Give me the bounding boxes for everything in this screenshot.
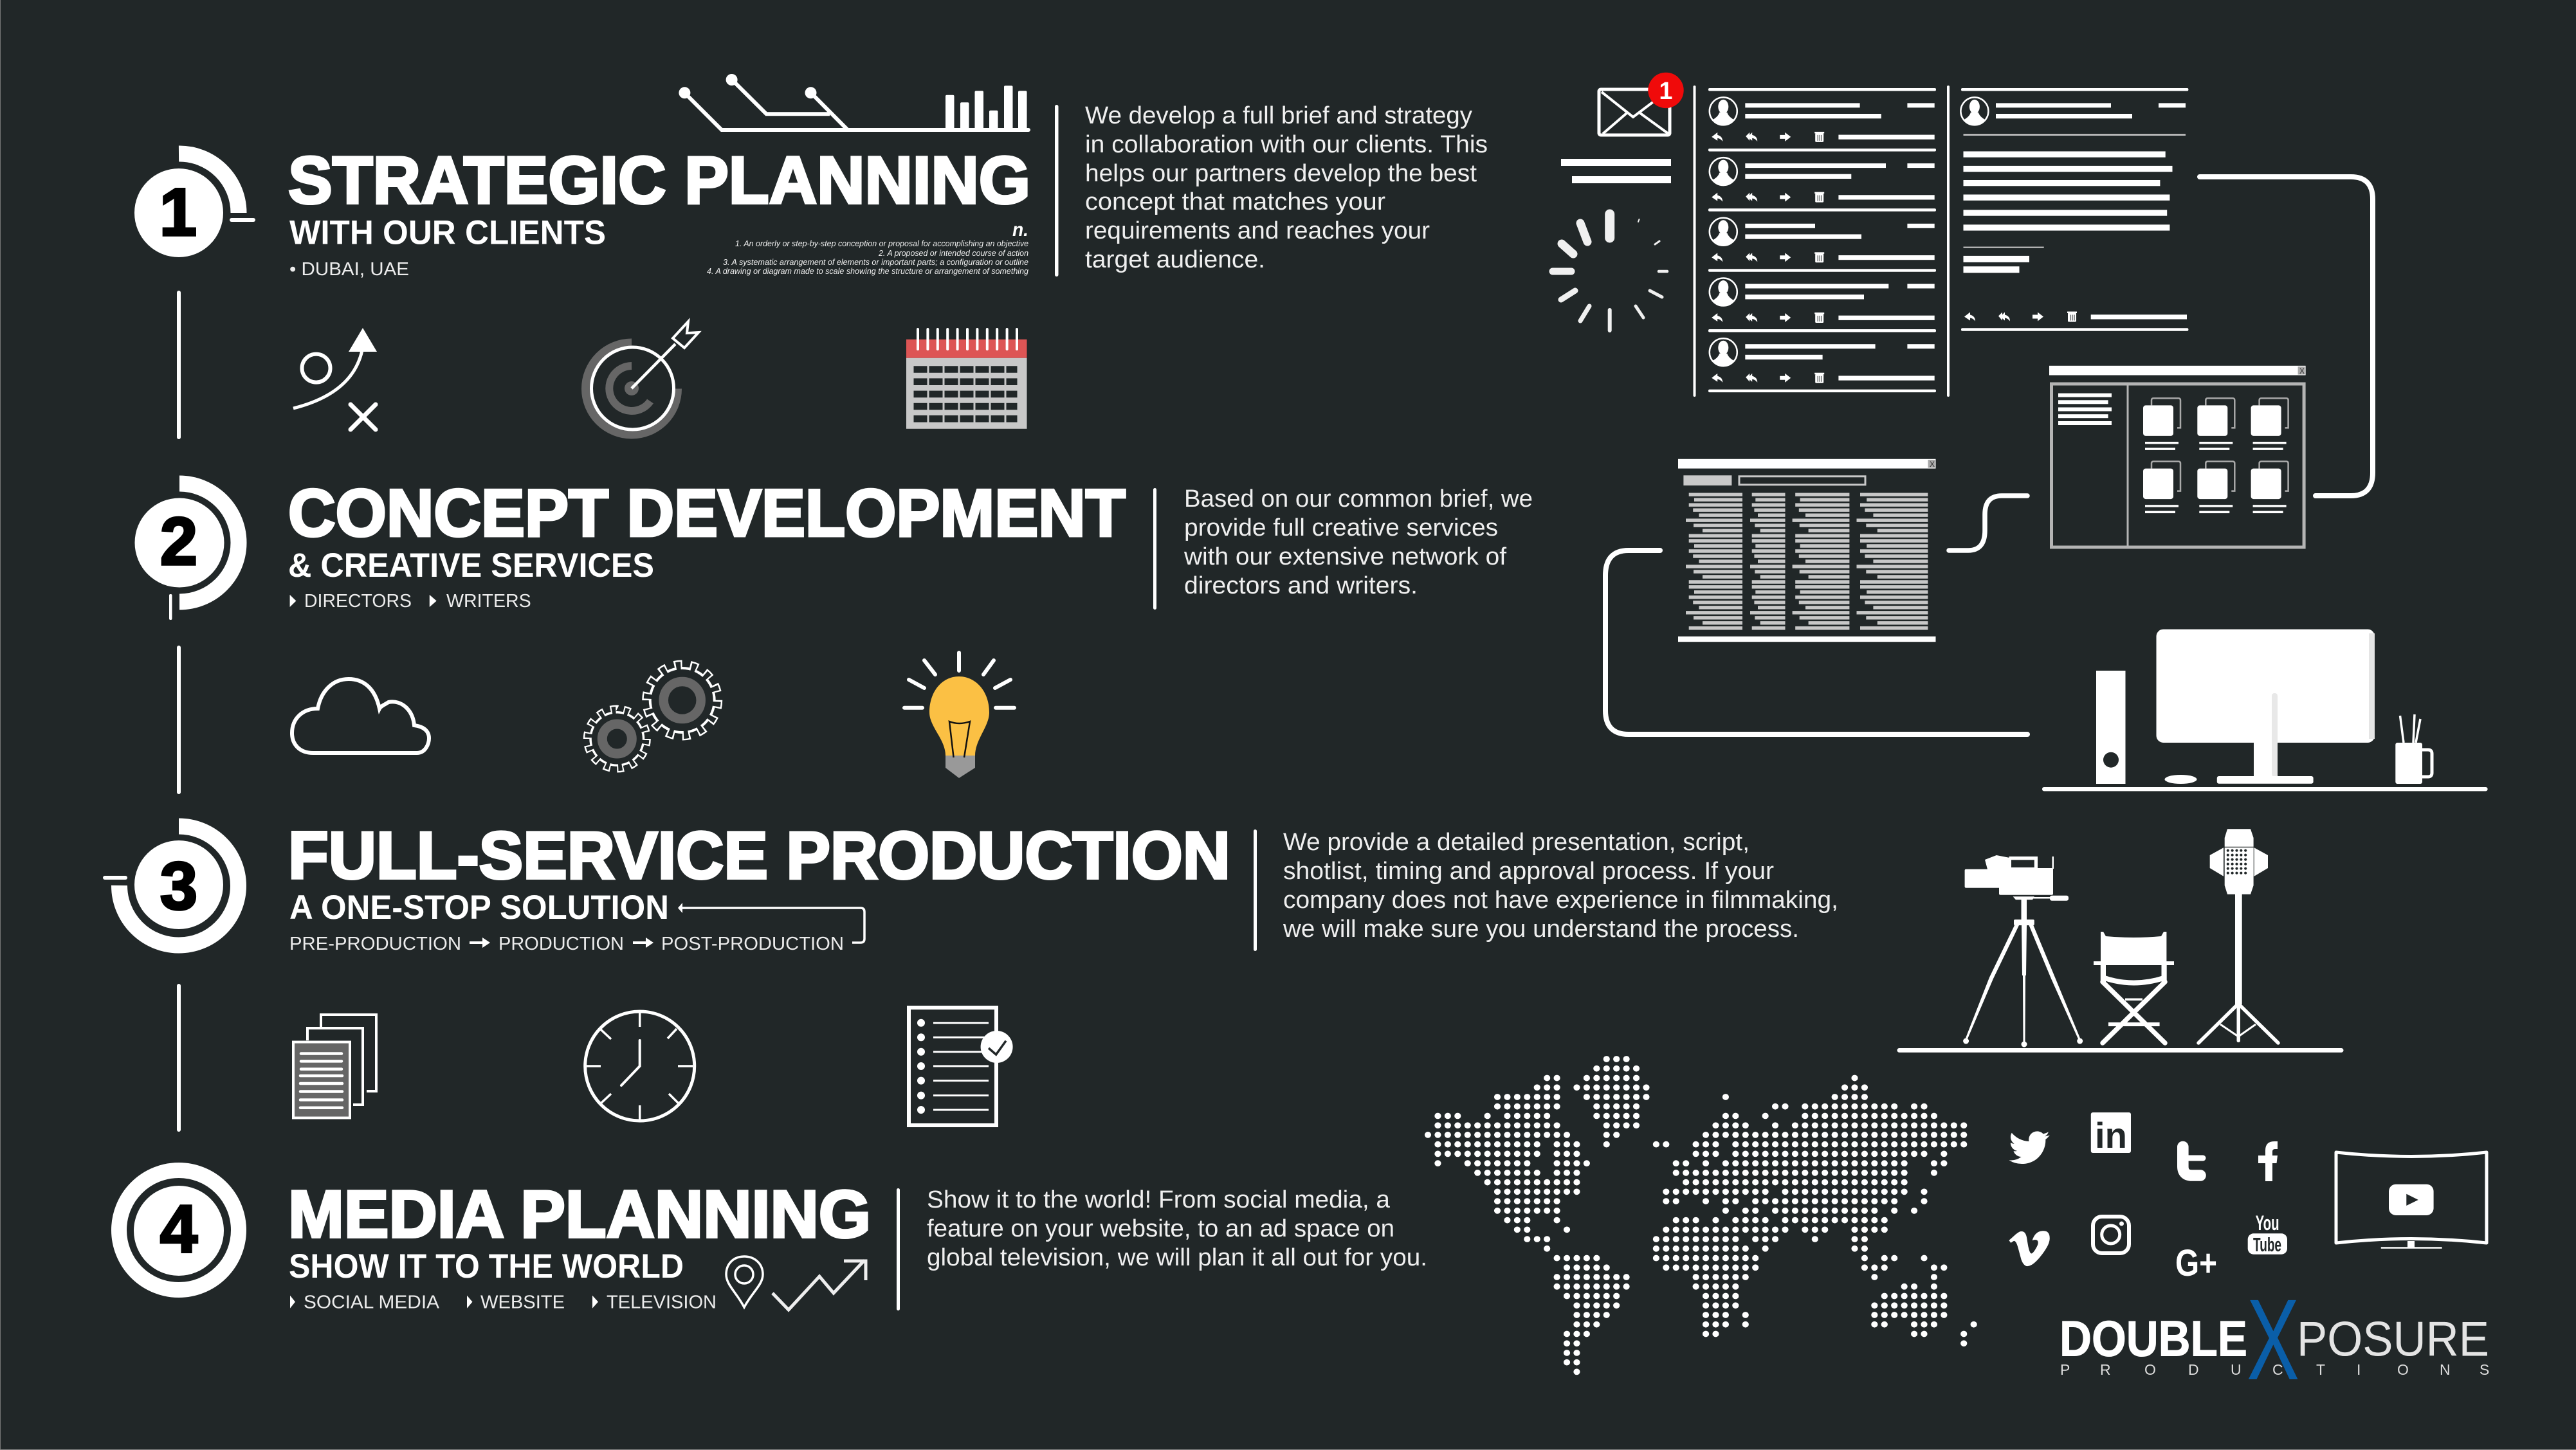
icon: play diagram [293, 328, 377, 430]
dictionary definition [707, 219, 1028, 276]
badge 3: 3 [160, 849, 197, 924]
logo: double xposure productions: DOUBLE [2060, 1310, 2247, 1367]
icon: vimeo [2009, 1231, 2050, 1266]
arrowhead [678, 903, 682, 913]
list: media channels: SOCIAL MEDIA [304, 1292, 440, 1313]
icon: youtube wordmark [2248, 1211, 2287, 1256]
section 4: media planning [119, 1170, 1427, 1313]
list: media channels: TELEVISION [607, 1292, 717, 1313]
badge 1 [134, 154, 255, 257]
icon: youtube wordmark: Tube [2253, 1233, 2281, 1256]
illustration: file browser window [2049, 366, 2306, 547]
heading: concept development: CONCEPT DEVELOPMENT [288, 476, 1126, 550]
icon: location pin [726, 1256, 763, 1307]
heading: full-service production: FULL-SERVICE PRODUCTION [288, 819, 1230, 893]
inbox lines [1561, 162, 1671, 180]
section 2: concept development [135, 476, 1533, 778]
logo: double xposure productions: X [2247, 1275, 2299, 1404]
list: media channels: WEBSITE [480, 1292, 565, 1313]
message row 3 [1710, 218, 1935, 262]
badge 4: 4 [160, 1192, 197, 1267]
illustration: film set [1897, 829, 2344, 1053]
icon: google plus: G+ [2175, 1242, 2217, 1284]
icon: checklist [909, 1008, 1013, 1125]
icon: light stand [2198, 829, 2278, 1043]
description 2: with our extensive network of [1183, 543, 1506, 570]
connector 1 to 2 [177, 291, 181, 439]
description 1: requirements and reaches your [1085, 217, 1430, 244]
logo: double xposure productions: PRODUCTIONS [2060, 1361, 2489, 1378]
logo: double xposure productions: POSURE [2297, 1312, 2489, 1367]
logo: double xposure productions [2060, 1275, 2489, 1404]
icon: gears [587, 665, 718, 768]
description 4: Show it to the world! From social media, a [927, 1186, 1391, 1213]
icon: target with arrow [586, 322, 699, 435]
description 2: Based on our common brief, we [1184, 485, 1533, 512]
icon: calendar [906, 329, 1027, 429]
icon: growth arrow [772, 1260, 866, 1310]
description 3: company does not have experience in filmmaking, [1283, 887, 1838, 914]
icon: light bulb [904, 653, 1014, 778]
illustration: desktop computer [2042, 630, 2488, 791]
illustration: dotted world map [1428, 1059, 1974, 1372]
icon: clock [585, 1011, 695, 1121]
connector: table to desk [1605, 550, 2027, 734]
description 1: in collaboration with our clients. This [1085, 131, 1488, 158]
subheading: creative services: & CREATIVE SERVICES [288, 547, 654, 585]
icon: loading spinner [1553, 214, 1667, 331]
description 1: concept that matches your [1085, 188, 1385, 215]
list: directors, writers [290, 591, 531, 612]
list: media channels [290, 1292, 717, 1313]
description 4 [927, 1186, 1427, 1271]
icon: strategy chart [679, 74, 1028, 131]
illustration: file browser window: X [2299, 367, 2305, 376]
dictionary definition: 1. An orderly or step-by-step conception or proposal for accomplishing an objective [735, 239, 1028, 248]
description 4: feature on your website, to an ad space on [927, 1215, 1394, 1242]
icon: twitter [2009, 1131, 2050, 1164]
dictionary definition: 4. A drawing or diagram made to scale showing the structure or arrangement of something [707, 267, 1028, 276]
icon: television with play button [2336, 1152, 2487, 1249]
subheading: show it to the world: SHOW IT TO THE WORLD [289, 1247, 684, 1285]
description 1: target audience. [1085, 246, 1265, 273]
connector 3 to 4 [177, 984, 181, 1132]
subheading: with our clients: WITH OUR CLIENTS [289, 213, 606, 252]
icon: director chair [2094, 932, 2174, 1043]
message detail [1960, 88, 2188, 331]
icon: youtube wordmark: You [2256, 1211, 2279, 1235]
description 1 [1085, 102, 1488, 273]
location: dubai: • DUBAI, UAE [289, 259, 409, 280]
subheading: one-stop solution: A ONE-STOP SOLUTION [289, 889, 669, 927]
icon: cloud [292, 679, 429, 753]
icon: tumblr [2183, 1147, 2203, 1175]
description 3 [1283, 829, 1838, 943]
icon: facebook [2258, 1141, 2278, 1181]
connector: email to files [2200, 177, 2373, 496]
message row 1 [1710, 97, 1935, 142]
illustration: spreadsheet window [1678, 459, 1936, 642]
icon: instagram [2093, 1217, 2129, 1253]
badge 4 [119, 1170, 239, 1290]
message row 2 [1710, 158, 1935, 203]
dictionary definition: 3. A systematic arrangement of elements or important parts; a configuration or outline [723, 258, 1028, 267]
description 1: helps our partners develop the best [1085, 160, 1477, 187]
inbox list [1708, 88, 1936, 392]
production pipeline: PRE-PRODUCTION [289, 934, 461, 954]
badge 2 [135, 484, 239, 620]
badge 2: 2 [160, 504, 197, 579]
icon: envelope with badge: 1 [1659, 78, 1673, 105]
description 2: directors and writers. [1184, 572, 1418, 599]
description 3: We provide a detailed presentation, script, [1283, 829, 1749, 856]
big gear [647, 665, 718, 736]
return arrow [682, 908, 864, 943]
connector: files to table [1949, 496, 2027, 550]
heading: media planning: MEDIA PLANNING [288, 1177, 871, 1252]
illustration: email client [1553, 73, 2188, 397]
description 2 [1183, 485, 1533, 599]
badge 1: 1 [160, 175, 197, 250]
connector 2 to 3 [177, 646, 181, 794]
list: directors, writers: WRITERS [446, 591, 531, 612]
message row 4 [1710, 278, 1935, 323]
description 4: global television, we will plan it all out for you. [927, 1244, 1427, 1271]
list: directors, writers: DIRECTORS [304, 591, 412, 612]
production pipeline: PRODUCTION [498, 934, 624, 954]
description 3: shotlist, timing and approval process. If your [1283, 858, 1774, 885]
small gear [587, 709, 646, 768]
badge 3 [103, 826, 238, 945]
production pipeline [289, 934, 844, 954]
heading: strategic planning: STRATEGIC PLANNING [288, 143, 1030, 218]
description 2: provide full creative services [1184, 514, 1498, 541]
icon: envelope with badge [1599, 73, 1684, 135]
description 3: we will make sure you understand the process. [1283, 916, 1799, 943]
description 1: We develop a full brief and strategy [1085, 102, 1472, 129]
message row 5 [1710, 338, 1935, 383]
icon: documents [293, 1015, 376, 1118]
dictionary definition: n. [1012, 219, 1028, 240]
illustration: spreadsheet window: X [1930, 460, 1935, 469]
icon: linkedin: in [2095, 1115, 2127, 1155]
section 1: strategic planning [134, 74, 1488, 435]
social media icons [2009, 1112, 2287, 1284]
production pipeline: POST-PRODUCTION [661, 934, 844, 954]
dictionary definition: 2. A proposed or intended course of action [878, 249, 1028, 258]
icon: camera on tripod [1963, 855, 2083, 1047]
section 3: full-service production [103, 819, 1838, 1125]
